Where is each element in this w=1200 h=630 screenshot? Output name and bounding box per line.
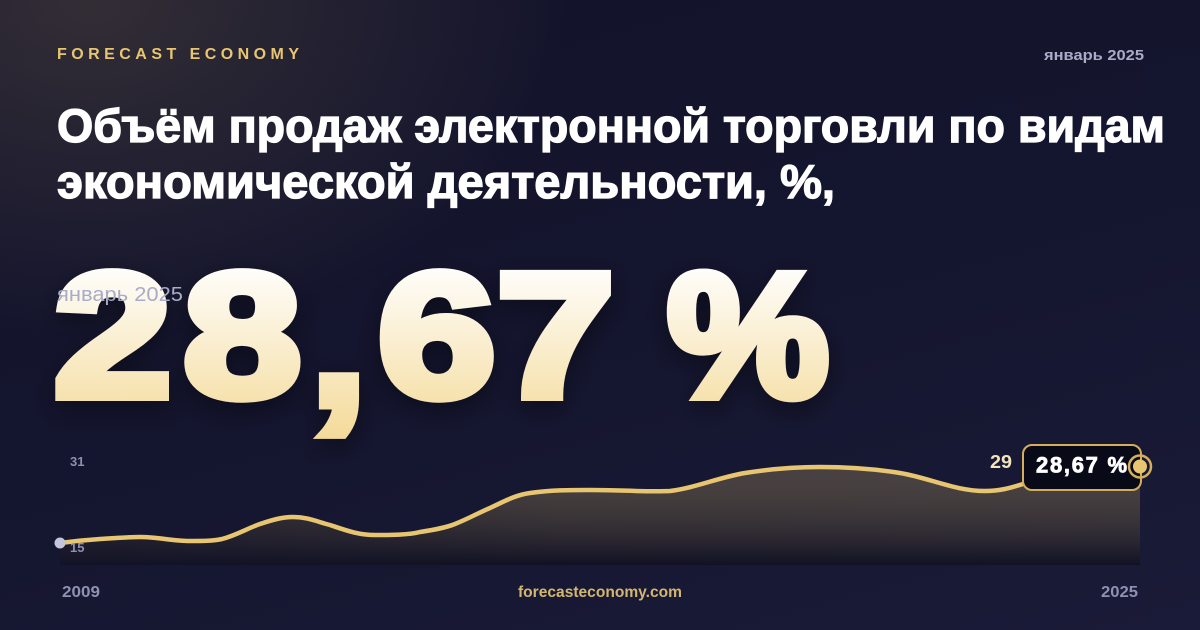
big value: % <box>667 236 829 433</box>
end point marker <box>1129 456 1151 478</box>
chart line <box>60 466 1140 543</box>
axis min label: 15 <box>70 540 84 555</box>
big value: , <box>309 233 368 446</box>
website footer: forecasteconomy.com <box>518 584 682 601</box>
end year: 2025 <box>1101 584 1138 601</box>
big value <box>54 233 829 446</box>
value callout <box>1023 445 1141 490</box>
chart area left fade <box>60 490 590 565</box>
brand label: FORECAST ECONOMY <box>57 46 299 63</box>
start point marker <box>54 538 66 548</box>
nearest value label: 29 <box>990 452 1012 472</box>
big value: 67 <box>378 238 614 434</box>
big value: 28 <box>54 238 301 434</box>
axis max label: 31 <box>70 454 84 469</box>
title <box>57 99 1165 208</box>
chart area fill <box>60 466 1140 565</box>
overlapping date label: январь 2025 <box>57 284 183 306</box>
start year: 2009 <box>62 584 100 601</box>
date top right: январь 2025 <box>1044 47 1144 64</box>
title: Объём продаж электронной торговли по видам <box>57 99 1165 152</box>
value callout: 28,67 % <box>1036 452 1127 478</box>
area chart <box>54 445 1151 565</box>
title: экономической деятельности, %, <box>57 155 835 208</box>
